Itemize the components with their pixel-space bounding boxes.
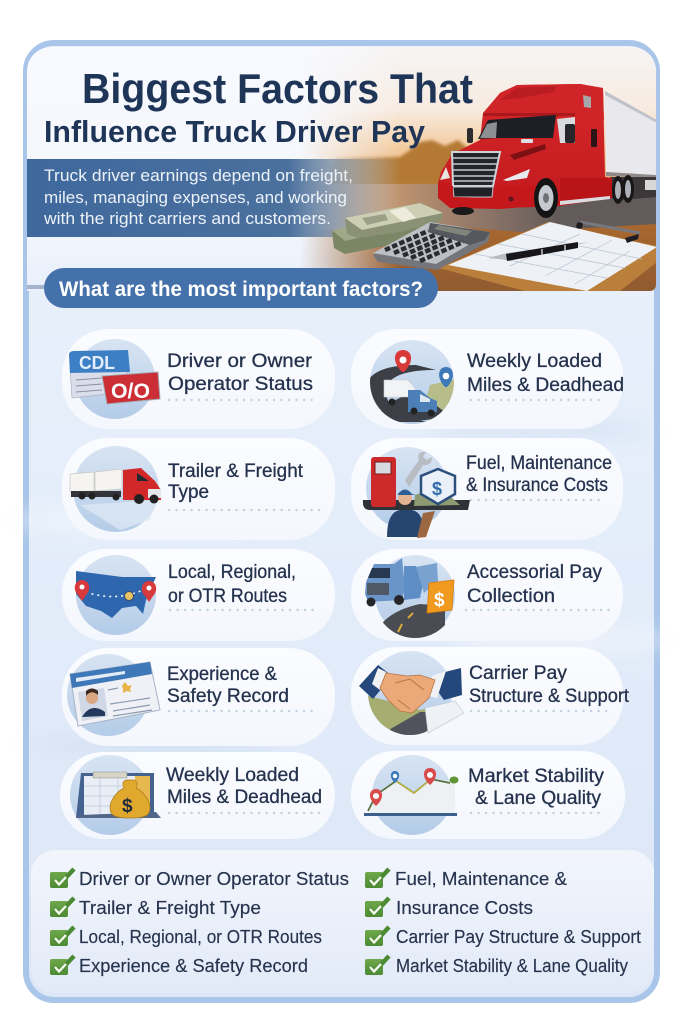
label <box>466 452 612 496</box>
icon: driver ID card <box>67 654 160 736</box>
label <box>467 350 624 396</box>
icon: US route map <box>75 555 156 635</box>
panel: summary checklist <box>31 850 654 993</box>
checklist left column: Driver or Owner Operator Status <box>79 869 349 889</box>
icon: blue truck, road and dollar tag <box>365 555 455 640</box>
icon: handshake over road <box>359 651 464 740</box>
title <box>44 65 473 149</box>
label: Miles & Deadhead <box>167 786 322 808</box>
label: Collection <box>467 585 555 607</box>
label <box>467 561 602 607</box>
label <box>469 662 630 707</box>
checklist left column: Local, Regional, or OTR Routes <box>79 927 322 947</box>
clipboard and pen <box>439 222 657 291</box>
icon: CDL and O/O cards: O/O <box>111 380 150 403</box>
cab and sleeper <box>438 84 612 208</box>
panel: experience and safety record <box>62 648 335 746</box>
checklist right column: Fuel, Maintenance & <box>395 869 567 889</box>
headlights <box>503 169 530 181</box>
label: Structure & Support <box>469 685 630 707</box>
panel: driver or owner operator status <box>62 329 335 429</box>
label: Weekly Loaded <box>166 764 299 786</box>
label: & Insurance Costs <box>466 474 608 496</box>
icon: fuel pump, wrench, shield, driver: $ <box>432 479 442 499</box>
intro text: miles, managing expenses, and working <box>44 189 347 207</box>
connector line <box>27 285 47 289</box>
panel: market stability and lane quality <box>351 751 625 839</box>
icon: CDL and O/O cards <box>69 339 160 419</box>
label <box>167 350 313 395</box>
intro text: with the right carriers and customers. <box>43 210 331 228</box>
sunset scene <box>300 47 660 295</box>
label <box>468 765 604 809</box>
label <box>168 460 304 503</box>
panel: weekly loaded miles and deadhead, left <box>60 752 335 839</box>
wheels <box>534 178 558 218</box>
panel: carrier pay structure and support <box>351 647 630 745</box>
calculator <box>373 222 490 270</box>
lower chassis <box>560 178 612 201</box>
checklist right column: Carrier Pay Structure & Support <box>396 927 641 947</box>
trailer <box>605 91 657 177</box>
panel: local, regional, or OTR routes <box>62 549 335 641</box>
label: Weekly Loaded <box>467 350 602 372</box>
intro text: Truck driver earnings depend on freight, <box>44 167 353 185</box>
label <box>166 764 322 808</box>
label: Accessorial Pay <box>467 561 602 583</box>
icon: truck on road <box>70 446 161 532</box>
icon: CDL and O/O cards: CDL <box>79 353 115 373</box>
label: & Lane Quality <box>475 787 601 809</box>
section heading pill <box>44 268 438 308</box>
title: Influence Truck Driver Pay <box>44 115 425 149</box>
icon: road, van and map pins <box>370 340 454 424</box>
label: Fuel, Maintenance <box>466 452 612 474</box>
section heading pill: What are the most important factors? <box>59 278 423 301</box>
label: Experience & <box>167 663 277 685</box>
label: Safety Record <box>167 685 289 707</box>
checklist left column <box>50 869 349 976</box>
label: or OTR Routes <box>168 585 287 607</box>
label: Local, Regional, <box>168 561 296 583</box>
panel: fuel, maintenance and insurance costs <box>351 438 623 540</box>
label: Type <box>168 481 209 503</box>
checklist right column: Market Stability & Lane Quality <box>396 956 628 976</box>
red truck <box>438 84 657 218</box>
label: Market Stability <box>468 765 604 787</box>
cash stacks <box>332 203 443 254</box>
title: Biggest Factors That <box>82 65 473 112</box>
icon: pay sheet and money bag <box>70 755 161 835</box>
label <box>167 663 289 707</box>
panel: accessorial pay collection <box>351 549 623 641</box>
grille <box>452 152 500 186</box>
icon: fuel pump, wrench, shield, driver <box>363 447 470 538</box>
checklist left column: Trailer & Freight Type <box>79 898 261 918</box>
label: Driver or Owner <box>167 350 313 372</box>
checklist right column: Insurance Costs <box>396 898 533 918</box>
icon: blue truck, road and dollar tag: $ <box>434 590 445 611</box>
panel: weekly loaded miles and deadhead, right <box>351 329 624 429</box>
icon: pay sheet and money bag: $ <box>122 796 133 817</box>
label <box>168 561 296 607</box>
bumper <box>438 186 522 209</box>
label: Trailer & Freight <box>168 460 304 482</box>
intro text <box>43 167 353 228</box>
intro band <box>27 159 400 237</box>
panel: trailer and freight type <box>62 438 335 540</box>
label: Carrier Pay <box>469 662 567 684</box>
checklist right column <box>365 869 641 976</box>
label: Miles & Deadhead <box>467 374 624 396</box>
hero banner <box>27 47 660 295</box>
label: Operator Status <box>168 373 313 395</box>
checklist left column: Experience & Safety Record <box>79 956 308 976</box>
icon: lane chart with map pins <box>364 755 458 835</box>
